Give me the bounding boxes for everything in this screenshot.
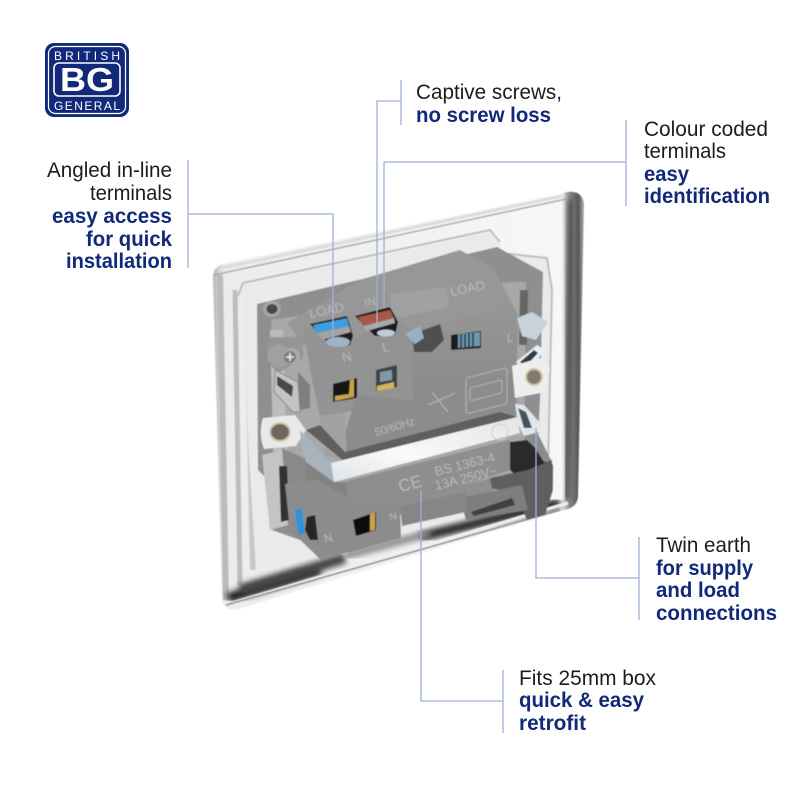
callout: captive screws: no screw loss [416,104,551,127]
housing upper shell [287,250,517,345]
housing moulded text [308,277,514,439]
housing lower rating text: CE [396,472,424,496]
housing right block [405,307,519,440]
callout: twin earth: connections [656,602,777,625]
callout: colour coded terminals: easy [644,163,689,186]
logo: British General: BRITISH [54,49,120,63]
recess frame [243,232,552,570]
leader: colour coded terminals [384,120,626,308]
left lug with screw [267,337,303,372]
callout: twin earth: for supply [656,557,753,580]
leader: angled in-line terminals [188,160,333,340]
housing moulded text: LOAD [308,299,345,321]
callout: colour coded terminals: terminals [644,140,726,163]
callout: fits 25mm box: Fits 25mm box [519,667,656,690]
grey mounting frame [257,247,543,540]
neutral strip [400,492,466,526]
callout: twin earth: and load [656,579,740,602]
N L terminal block [303,318,413,416]
callout: angled in-line terminals: terminals [90,182,172,205]
N lower terminal block [285,480,401,560]
housing moulded text: N [341,348,353,365]
socket rear photo illustration [213,192,584,610]
callout: captive screws: Captive screws, [416,81,562,104]
leader: captive screws [377,80,401,327]
callout: angled in-line terminals: for quick [86,228,172,251]
cover tab [390,287,449,318]
callout: colour coded terminals: Colour coded [644,118,768,141]
metal strap [300,412,520,482]
column under strap [306,462,347,500]
faceplate [213,192,584,610]
lug left lower [261,415,306,449]
callout: captive screws [416,81,562,127]
lower centre body [345,372,517,462]
housing moulded text: LOAD [449,277,486,299]
housing moulded text: IN [363,294,377,310]
shadow recess between blocks [412,324,444,352]
screw hole right [451,331,481,350]
callout: fits 25mm box [519,667,656,735]
clip bracket [274,370,310,412]
callout: fits 25mm box: retrofit [519,712,586,735]
lower housing [346,440,510,506]
housing lower rating text: BS 1363-4 [433,449,496,479]
square socket hole L [376,365,397,391]
callout: angled in-line terminals: Angled in-line [47,159,172,182]
callout: colour coded terminals [644,118,770,208]
terminal red in [355,307,424,344]
callout: angled in-line terminals: installation [66,250,172,273]
black void and earth hook [460,434,553,520]
logo: British General: GENERAL [54,99,120,113]
N lower terminal block: N [322,530,334,546]
housing moulded text: 50/60Hz [374,416,416,439]
N lower terminal block: N [389,511,398,523]
callout: twin earth [656,534,777,625]
callout: twin earth: Twin earth [656,534,751,557]
square socket hole N [333,378,357,402]
earth terminals and lug right [512,312,550,436]
terminal blue load [310,316,353,347]
recess frame highlights [238,230,552,470]
leader: twin earth [536,428,639,620]
logo: British General: BG [60,61,114,98]
housing moulded text: L [381,339,391,355]
callout: colour coded terminals: identification [644,185,770,208]
housing lower rating text [396,449,499,496]
leader: fits 25mm box [421,490,503,733]
housing lower rating text: 13A 250V~ [433,463,499,493]
callout: angled in-line terminals: easy access [52,205,172,228]
callout: fits 25mm box: quick & easy [519,689,644,712]
moulded BG mark [428,368,507,414]
logo: British General [45,43,129,117]
housing moulded text: L [507,331,514,345]
callout: angled in-line terminals [47,159,172,273]
